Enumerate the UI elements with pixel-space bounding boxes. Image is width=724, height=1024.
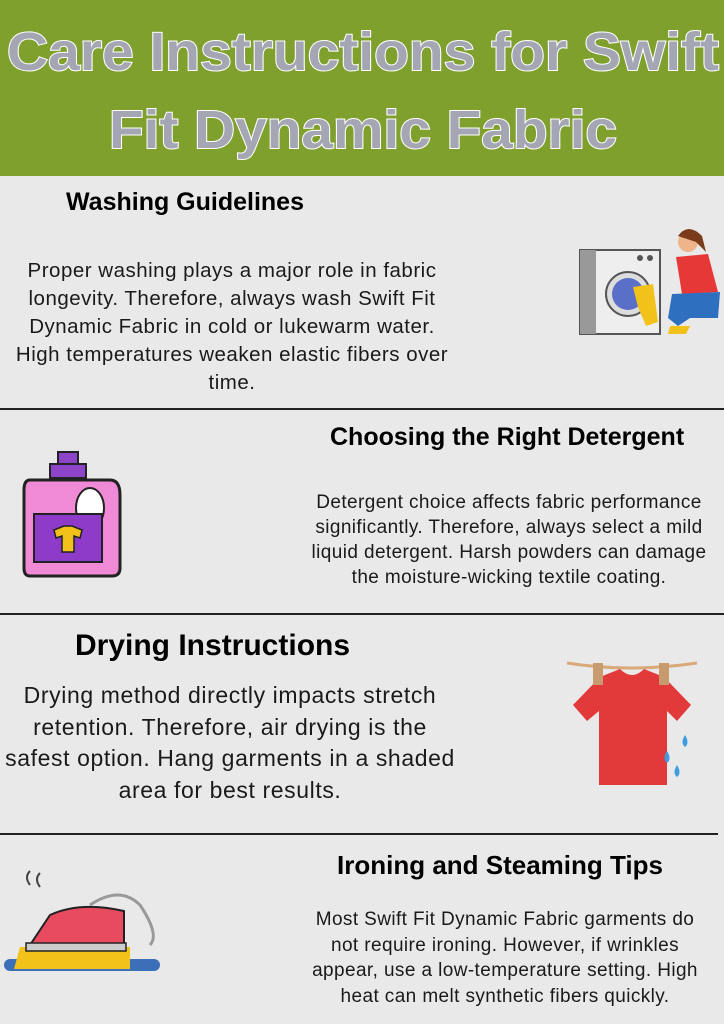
text: detergent: significantly. Therefore, always select a mild [315,517,703,538]
text: ironing: Most Swift Fit Dynamic Fabric garments do [316,909,694,930]
text: washing: Proper washing plays a major role in fabric [28,259,436,282]
title [7,22,719,160]
text: drying [5,682,455,802]
section: drying [5,629,698,802]
text: washing: time. [209,371,255,394]
heading: ironing: Ironing and Steaming Tips [337,850,663,880]
text: ironing [312,909,698,1006]
text: detergent [312,492,706,588]
text: drying: Drying method directly impacts stretch [24,682,436,708]
text: ironing: heat can melt synthetic fibers quickly. [341,986,669,1006]
text: ironing: appear, use a low-temperature setting. High [312,960,698,981]
text: washing [16,259,448,394]
text: detergent: liquid detergent. Harsh powders can damage [312,542,706,563]
heading: detergent: Choosing the Right Detergent [330,423,684,451]
icon: detergent bottle [22,451,122,578]
text: detergent: the moisture-wicking textile coating. [352,567,666,588]
text: washing: Dynamic Fabric in cold or lukewarm water. [29,315,435,338]
heading: washing: Washing Guidelines [66,188,304,216]
text: washing: longevity. Therefore, always wash Swift Fit [28,287,435,310]
text: detergent: Detergent choice affects fabric performance [316,492,702,513]
text: drying: safest option. Hang garments in a shaded [5,745,455,771]
text: ironing: not require ironing. However, if wrinkles [331,934,679,956]
heading: drying: Drying Instructions [75,629,350,662]
title: Fit Dynamic Fabric [109,100,617,160]
section: ironing [4,850,698,1006]
title banner [0,0,724,176]
icon: red shirt drying [566,662,698,785]
icon: iron [4,870,160,971]
icon: washing machine with woman [579,229,720,335]
text: drying: retention. Therefore, air drying is the [33,714,427,740]
title: Care Instructions for Swift [7,22,719,82]
section: detergent [22,423,706,588]
text: washing: High temperatures weaken elastic fibers over [16,343,448,366]
text: drying: area for best results. [119,776,341,802]
section: washing [16,188,448,394]
